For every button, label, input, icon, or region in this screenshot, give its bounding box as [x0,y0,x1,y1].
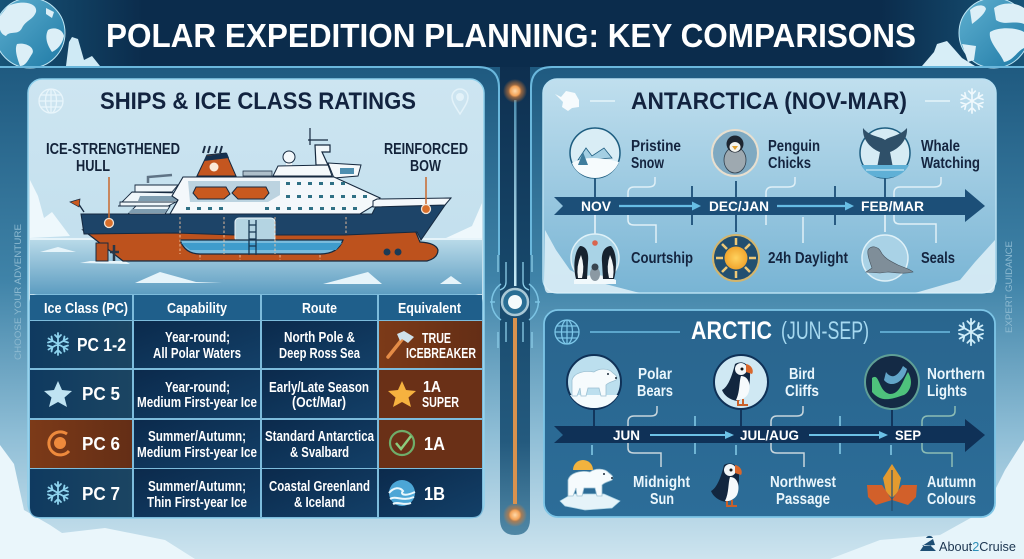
table row: PC 1-2: PC 1-2 [77,335,126,355]
icon: snowflake [959,319,983,345]
side text: choose your adventure: CHOOSE YOUR ADVENTURE [13,224,24,360]
label: northwest passage [770,474,837,508]
label: polar bears: Polar [638,366,672,383]
title rules [590,331,950,333]
table row: PC 1-2: TRUE [422,331,451,347]
icon: hammer [388,331,414,357]
funnel [197,146,236,176]
icon: left icebergs [30,180,70,238]
label: pristine snow: Pristine [631,138,681,155]
icon: sun [713,235,759,281]
month arrows [619,205,846,207]
stern radar [148,175,172,183]
ship illustration [70,128,451,261]
heading: ships: SHIPS & ICE CLASS RATINGS [100,88,416,115]
side text: expert guidance: EXPERT GUIDANCE [1004,241,1015,333]
icon: pristine snow [570,128,620,178]
lifeboat recess [188,181,280,202]
flag [70,199,84,212]
label: whale watching: Watching [921,155,980,172]
label: pristine snow: Snow [631,155,664,172]
header band [0,0,1024,67]
icon: right icebergs [446,203,482,238]
icon: right globe [922,0,1024,68]
label: bird cliffs: Cliffs [785,383,819,400]
timeline arrow [554,189,985,222]
table row: PC 5: PC 5 [82,384,120,404]
label: northern lights: Lights [927,383,967,400]
heading: arctic: (JUN-SEP) [781,317,869,345]
table row: PC 1-2: ICEBREAKER [406,346,476,362]
label: northwest passage: Northwest [770,474,837,491]
label: bird cliffs: Bird [789,366,815,383]
upper white decks [273,165,332,176]
month arrowheads [725,431,888,439]
floating ice corners [544,230,995,293]
table row: PC 6: Medium First-year Ice [137,445,257,461]
callout: ice-strengthened hull: HULL [76,158,110,175]
table row: PC 6: & Svalbard [290,445,349,461]
label: northern lights [927,366,985,400]
icon: puffin circle [714,355,768,409]
table row: PC 5 [30,370,482,418]
lifeboats [193,187,269,199]
month label: nov: NOV [581,198,612,214]
table row: PC 6: PC 6 [82,434,120,454]
callout: ice-strengthened hull [46,141,180,228]
table header row: Route [302,301,337,317]
bow deck [373,198,451,207]
right frame border [531,67,1024,255]
sea [30,238,482,294]
table row: PC 7: Coastal Greenland [269,479,370,495]
bulb ports [384,248,402,256]
panel: antarctica [543,79,996,293]
logo: about2cruise [920,536,1016,554]
callout: reinforced bow [384,141,468,214]
centre node [490,284,540,320]
label: whale watching: Whale [921,138,960,155]
month arrows [650,434,881,436]
label: midnight sun: Sun [650,491,674,508]
table row: PC 6: 1A [424,434,445,454]
logo: about2cruise: About2Cruise [939,539,1016,554]
table header row [30,295,482,320]
label: whale watching [921,138,980,172]
month label: sep: SEP [895,427,921,443]
ice floes [30,238,482,284]
table row: PC 6: Summer/Autumn; [148,429,246,445]
icon: courtship penguins [571,234,619,284]
title rules [590,100,950,102]
label: penguin chicks [768,138,820,172]
radar dome [283,151,295,166]
table row: PC 5: (Oct/Mar) [292,395,346,411]
title: POLAR EXPEDITION PLANNING: KEY COMPARISONS [106,17,916,54]
table row: PC 5: Medium First-year Ice [137,395,257,411]
month arrowheads [692,202,854,210]
table row: PC 1-2: North Pole & [284,330,355,346]
top node [503,79,527,103]
callout: reinforced bow: REINFORCED [384,141,468,158]
icon: left globe [0,0,100,68]
table header row: Ice Class (PC) [44,301,128,317]
label: autumn colours: Autumn [927,474,976,491]
label: autumn colours: Colours [927,491,976,508]
label: midnight sun [633,474,691,508]
timeline stems [595,178,885,232]
connector lines [628,177,941,243]
label: 24h daylight: 24h Daylight [768,250,849,267]
icon: globe [555,320,579,344]
month label: dec/jan: DEC/JAN [709,198,769,214]
table row: PC 7: PC 7 [82,484,120,504]
table row: PC 5: Early/Late Season [269,380,369,396]
hull navy [81,198,450,240]
table row: PC 7: Summer/Autumn; [148,479,246,495]
panel: ships and ice class ratings [28,79,484,518]
heading: arctic [691,317,869,345]
label: courtship: Courtship [631,250,693,267]
mast [308,128,330,165]
connector lines right [922,406,955,467]
cutaway ice hull [180,218,343,255]
table row: PC 5: Year-round; [165,380,230,396]
bottom node [503,503,527,527]
table row: PC 1-2: Year-round; [165,330,230,346]
heading: arctic: ARCTIC [691,317,772,345]
hull orange [83,230,438,261]
frame lines [180,217,346,260]
lower orange line [513,318,517,504]
table row: PC 7: 1B [424,484,445,504]
rudder and propeller [96,243,119,261]
table row: PC 6 [30,420,482,468]
label: northern lights: Northern [927,366,985,383]
table row: PC 1-2: All Polar Waters [153,346,241,362]
label: seals: Seals [921,250,955,267]
center connector strip [490,67,540,535]
icon: northern lights [865,355,919,409]
table row: PC 7: Thin First-year Ice [147,495,247,511]
stern windows [128,196,180,213]
timeline stems lower [595,215,885,235]
left frame border [0,67,499,255]
table header row: Equivalent [398,301,461,317]
superstructure [170,177,380,214]
label: polar bears [637,366,673,400]
table row: PC 5: SUPER [422,395,459,411]
label: bird cliffs [785,366,819,400]
label: penguin chicks: Chicks [768,155,811,172]
table row: PC 1-2 [30,321,482,368]
table row: PC 1-2: Deep Ross Sea [279,346,361,362]
table header row: Capability [167,301,227,317]
month label: feb/mar: FEB/MAR [861,198,924,214]
callout: reinforced bow: BOW [410,158,442,175]
connector lines [628,406,804,467]
label: penguin chicks: Penguin [768,138,820,155]
label: northwest passage: Passage [776,491,830,508]
windows [186,182,367,210]
icon: map pin [452,89,468,114]
label: pristine snow [631,138,681,172]
bridge [328,163,361,178]
icon: midnight sun bear [560,460,620,510]
timeline arrow [554,419,985,452]
table row: PC 6: Standard Antarctica [265,429,375,445]
icon: seal [862,235,913,281]
icon: autumn leaves [867,464,917,511]
month label: jun: JUN [613,427,640,443]
table row: PC 5: 1A [423,379,441,396]
icon: bottom-left iceberg [0,445,195,559]
panel: arctic [544,310,995,517]
label: midnight sun: Midnight [633,474,691,491]
icon: globe [39,89,63,113]
lower stems and ticks [592,416,891,455]
upper light line [514,100,516,286]
label: polar bears: Bears [637,383,673,400]
icon: polar bear [567,355,621,409]
stern decks [118,185,184,214]
heading: antarctica: ANTARCTICA (NOV-MAR) [631,88,907,115]
icon: antarctica continent [555,91,579,111]
icon: snowflake [961,89,983,113]
table row: PC 7 [30,469,482,517]
icon: bottom-right iceberg [830,440,1024,559]
callout: ice-strengthened hull: ICE-STRENGTHENED [46,141,180,158]
icon: penguin chick [712,130,758,176]
month label: jul/aug: JUL/AUG [740,427,799,443]
label: autumn colours [927,474,976,508]
table row: PC 7: & Iceland [294,495,345,511]
icon: puffin [711,463,742,506]
icon: whale tail [860,128,910,178]
stems [594,409,892,426]
table: ice class comparison [29,294,483,518]
